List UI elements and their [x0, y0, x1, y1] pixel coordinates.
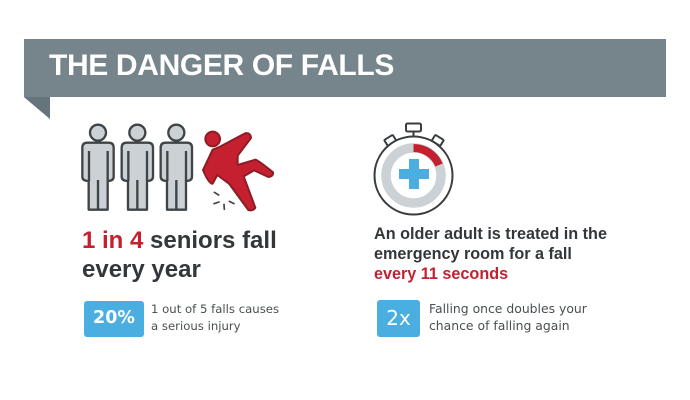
text: falling again: chance of falling again	[429, 318, 570, 333]
heading: 1 in 4 seniors fall: every year	[82, 256, 201, 282]
text: emergency room: emergency room for a fall	[374, 245, 572, 263]
banner	[24, 39, 666, 119]
gauge red arc	[414, 148, 439, 165]
badge: 2x: 2x	[386, 306, 411, 330]
badge: 20%: 20%	[93, 308, 135, 328]
badge: 2x	[377, 300, 420, 337]
text: serious injury: a serious injury	[151, 319, 241, 333]
icon: three standing seniors and one falling	[81, 124, 274, 212]
title: THE DANGER OF FALLS	[49, 49, 394, 82]
text: falling again: Falling once doubles your	[429, 301, 587, 316]
standing person 2	[122, 125, 153, 210]
text: emergency room	[374, 225, 607, 283]
heading: 1 in 4 seniors fall	[82, 227, 277, 282]
standing person 1	[82, 125, 114, 210]
standing person 3	[161, 125, 192, 210]
cross	[399, 159, 429, 189]
badge: 20%	[84, 301, 144, 337]
text: falling again	[429, 301, 587, 333]
impact marks	[214, 192, 234, 209]
falling person	[203, 132, 273, 210]
gauge ring	[386, 148, 441, 203]
top button	[374, 124, 452, 214]
icon: stopwatch	[374, 122, 454, 216]
text: serious injury	[151, 302, 279, 333]
text: emergency room: every 11 seconds	[374, 265, 508, 283]
heading: 1 in 4 seniors fall: 1 in 4 seniors fall	[82, 227, 277, 254]
text: serious injury: 1 out of 5 falls causes	[151, 302, 279, 316]
text: emergency room: An older adult is treated in the	[374, 225, 607, 243]
